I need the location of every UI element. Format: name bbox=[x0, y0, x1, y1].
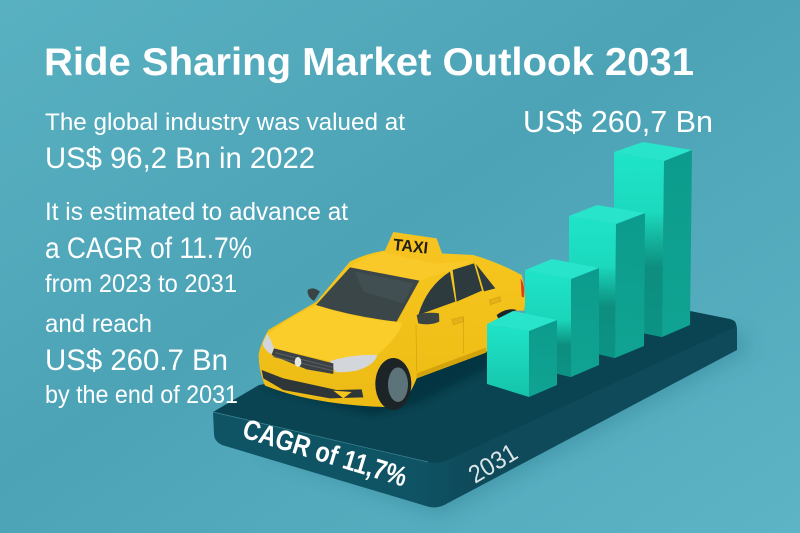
bar 2 bbox=[525, 259, 599, 377]
mirrors bbox=[308, 288, 439, 324]
text block: CAGR estimate: from 2023 to 2031 bbox=[45, 270, 237, 298]
platform shadow bbox=[260, 330, 750, 515]
lower intake bbox=[262, 370, 363, 398]
taxi car: TAXI bbox=[392, 235, 429, 258]
bar 4 bbox=[614, 142, 692, 337]
text block: 2031 forecast: US$ 260.7 Bn bbox=[45, 344, 228, 377]
bar 1 bbox=[487, 311, 557, 397]
badge bbox=[295, 357, 301, 367]
side windows bbox=[418, 263, 495, 315]
platform label: CAGR: CAGR of 11,7% bbox=[239, 413, 411, 492]
platform sides bbox=[213, 322, 737, 507]
platform top bbox=[213, 311, 736, 463]
door lines and handles bbox=[416, 297, 501, 372]
windshield bbox=[316, 267, 419, 322]
car body bbox=[259, 251, 525, 407]
tail light bbox=[521, 278, 524, 297]
title: Ride Sharing Market Outlook 2031 bbox=[44, 41, 694, 84]
bar chart bbox=[487, 142, 692, 397]
chart value label: US$ 260,7 Bn bbox=[523, 104, 713, 139]
sill bbox=[417, 348, 486, 378]
rear wheel arch bbox=[497, 309, 517, 318]
text block: CAGR estimate bbox=[45, 198, 348, 298]
roof bbox=[350, 253, 473, 281]
text block: 2031 forecast bbox=[45, 310, 238, 409]
headlights bbox=[263, 333, 377, 372]
hood bbox=[268, 305, 402, 361]
text block: 2022 valuation: US$ 96,2 Bn in 2022 bbox=[45, 142, 315, 175]
text block: 2022 valuation: The global industry was valued at bbox=[45, 109, 405, 136]
text block: 2022 valuation bbox=[45, 109, 405, 175]
grille bbox=[272, 348, 333, 374]
bar 3 bbox=[569, 205, 645, 358]
platform label: year: 2031 bbox=[464, 438, 523, 489]
text block: 2031 forecast: by the end of 2031 bbox=[45, 381, 238, 409]
car shadow bbox=[263, 313, 507, 415]
taxi car bbox=[259, 232, 525, 415]
text block: CAGR estimate: It is estimated to advance at bbox=[45, 198, 348, 226]
text block: CAGR estimate: a CAGR of 11.7% bbox=[45, 232, 252, 265]
front wheel bbox=[375, 358, 411, 410]
text block: 2031 forecast: and reach bbox=[45, 310, 152, 338]
platform bbox=[213, 311, 750, 515]
taxi sign bbox=[384, 232, 445, 264]
